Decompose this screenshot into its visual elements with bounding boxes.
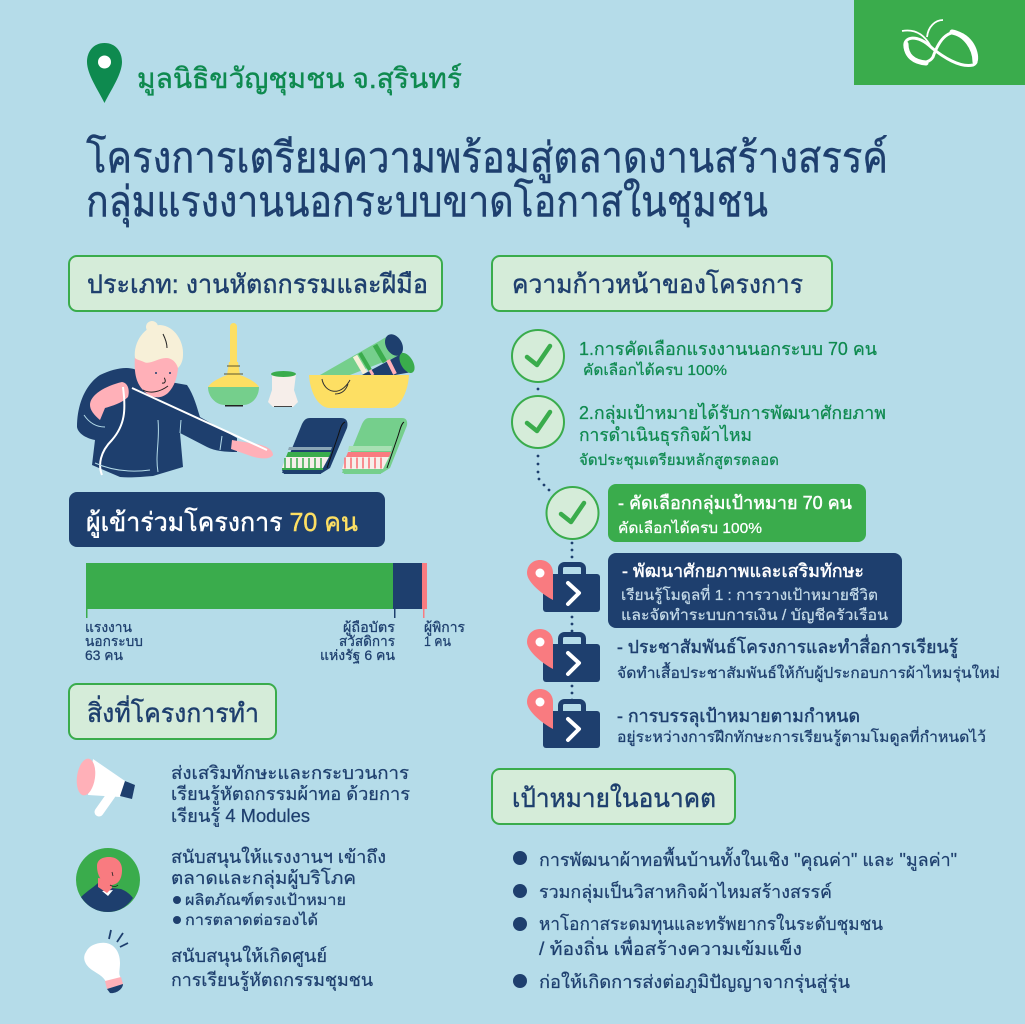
icon: person in circle (76, 848, 140, 912)
icon: folded green cloth (342, 418, 407, 474)
navy status box: เรียนรู้โมดูลที่ 1 : การวางเป้าหมายชีวิต (621, 584, 878, 604)
text: activity 1: เรียนรู้ 4 Modules (171, 806, 310, 827)
text: activity 1: เรียนรู้หัตถกรรมผ้าทอ ด้วยการ (171, 784, 410, 805)
check icon 1 (512, 330, 564, 382)
main title: โครงการเตรียมความพร้อมสู่ตลาดงานสร้างสรรค์ (86, 133, 888, 183)
heading: future goals (492, 769, 735, 824)
label: welfare card holders: ผู้ถือบัตร (343, 619, 395, 636)
progress item: publicity: - ประชาสัมพันธ์โครงการและทำสื่อการเรียนรู้ (617, 634, 958, 658)
progress item: target: อยู่ระหว่างการฝึกทักษะการเรียนรู้ตามโมดูลที่กำหนดไว้ (617, 726, 986, 746)
heading: type (69, 256, 442, 311)
main title: กลุ่มแรงงานนอกระบบขาดโอกาสในชุมชน (86, 177, 768, 228)
progress item: publicity (617, 634, 1000, 683)
text: activity 2: ผลิตภัณฑ์ตรงเป้าหมาย (185, 892, 346, 909)
check icon 2 (512, 396, 564, 448)
text: activity 1: ส่งเสริมทักษะและกระบวนการ (171, 763, 409, 783)
label: disabled (424, 619, 465, 649)
label: informal workers: แรงงาน (85, 619, 132, 635)
label: disabled: ผู้พิการ (424, 619, 465, 636)
label: welfare card holders: สวัสดิการ (339, 633, 395, 649)
progress item 2: จัดประชุมเตรียมหลักสูตรตลอด (579, 452, 779, 470)
illustration: weaver and crafts (77, 321, 418, 477)
text: activity 2: การตลาดต่อรองได้ (185, 911, 318, 929)
icon: cup (268, 371, 298, 407)
participants label: ผู้เข้าร่วมโครงการ 70 คน (86, 507, 358, 538)
future goals list (513, 847, 957, 993)
heading: type: ประเภท: งานหัตถกรรมและฝีมือ (87, 269, 428, 299)
progress item 2: การดำเนินธุรกิจผ้าไหม (579, 424, 752, 446)
text: activity 2: ตลาดและกลุ่มผู้บริโภค (171, 867, 356, 889)
logo block (854, 0, 1025, 85)
navy status box: - พัฒนาศักยภาพและเสริมทักษะ (622, 561, 864, 581)
icon: megaphone (75, 757, 135, 812)
progress item: target: - การบรรลุเป้าหมายตามกำหนด (617, 706, 860, 727)
heading: future goals: เป้าหมายในอนาคต (512, 783, 716, 813)
heading: progress: ความก้าวหน้าของโครงการ (512, 269, 803, 299)
green status box: คัดเลือกได้ครบ 100% (618, 519, 762, 537)
icon: light bulb (84, 930, 128, 993)
label: informal workers (85, 619, 143, 663)
text: activity 2 (171, 846, 386, 929)
navy status box: และจัดทำระบบการเงิน / บัญชีครัวเรือน (621, 607, 888, 624)
label: welfare card holders (320, 619, 395, 664)
dotted timeline (537, 388, 573, 701)
text: activity 3: การเรียนรู้หัตถกรรมชุมชน (171, 970, 373, 991)
label: disabled: 1 คน (424, 633, 451, 649)
icon: pin and briefcase 1 (527, 560, 600, 612)
icon: basket with rolled cloth (309, 331, 418, 408)
progress item 1 (579, 339, 877, 379)
future goals list: หาโอกาสระดมทุนและทรัพยากรในระดับชุมชน (539, 913, 883, 935)
future goals list: ก่อให้เกิดการส่งต่อภูมิปัญญาจากรุ่นสู่รุ่น (539, 971, 850, 993)
navy status box (608, 553, 902, 628)
future goals list: การพัฒนาผ้าทอพื้นบ้านทั้งในเชิง "คุณค่า" และ "มูลค่า" (539, 847, 957, 871)
heading: activities: สิ่งที่โครงการทำ (87, 695, 259, 728)
progress item 1: 1.การคัดเลือกแรงงานนอกระบบ 70 คน (579, 339, 877, 359)
progress item 2: 2.กลุ่มเป้าหมายได้รับการพัฒนาศักยภาพ (579, 402, 886, 424)
future goals list: รวมกลุ่มเป็นวิสาหกิจผ้าไหมสร้างสรรค์ (539, 880, 832, 903)
label: informal workers: นอกระบบ (85, 633, 143, 649)
icon: location pin (87, 43, 122, 103)
icon: pin and briefcase 2 (527, 629, 600, 682)
text: activity 2: สนับสนุนให้แรงงานฯ เข้าถึง (171, 846, 386, 868)
text: activity 1 (171, 763, 410, 827)
heading: progress (492, 256, 832, 311)
icon: pin and briefcase 3 (527, 689, 600, 748)
future goals list: / ท้องถิ่น เพื่อสร้างความเข้มแข็ง (539, 936, 802, 959)
check icon 3 (546, 487, 598, 539)
stacked bar chart (85, 563, 465, 664)
icon: weaver woman (77, 321, 273, 477)
heading: activities (69, 684, 276, 739)
green status box (608, 484, 866, 542)
progress item: publicity: จัดทำเสื้อประชาสัมพันธ์ให้กับผู้ประกอบการผ้าไหมรุ่นใหม่ (617, 662, 1000, 683)
label: informal workers: 63 คน (85, 647, 123, 663)
green status box: - คัดเลือกกลุ่มเป้าหมาย 70 คน (618, 493, 852, 514)
label: welfare card holders: แห่งรัฐ 6 คน (320, 647, 395, 664)
progress item: target (617, 706, 986, 746)
organisation name: มูลนิธิขวัญชุมชน จ.สุรินทร์ (137, 63, 462, 96)
text: activity 3 (171, 945, 373, 991)
icon: yellow spindle bowl (208, 323, 259, 406)
main title (86, 133, 888, 228)
participants label (69, 492, 385, 547)
progress item 2 (579, 402, 886, 470)
icon: folded navy cloth (282, 418, 347, 474)
text: activity 3: สนับสนุนให้เกิดศูนย์ (171, 945, 327, 967)
progress item 1: คัดเลือกได้ครบ 100% (583, 361, 727, 379)
